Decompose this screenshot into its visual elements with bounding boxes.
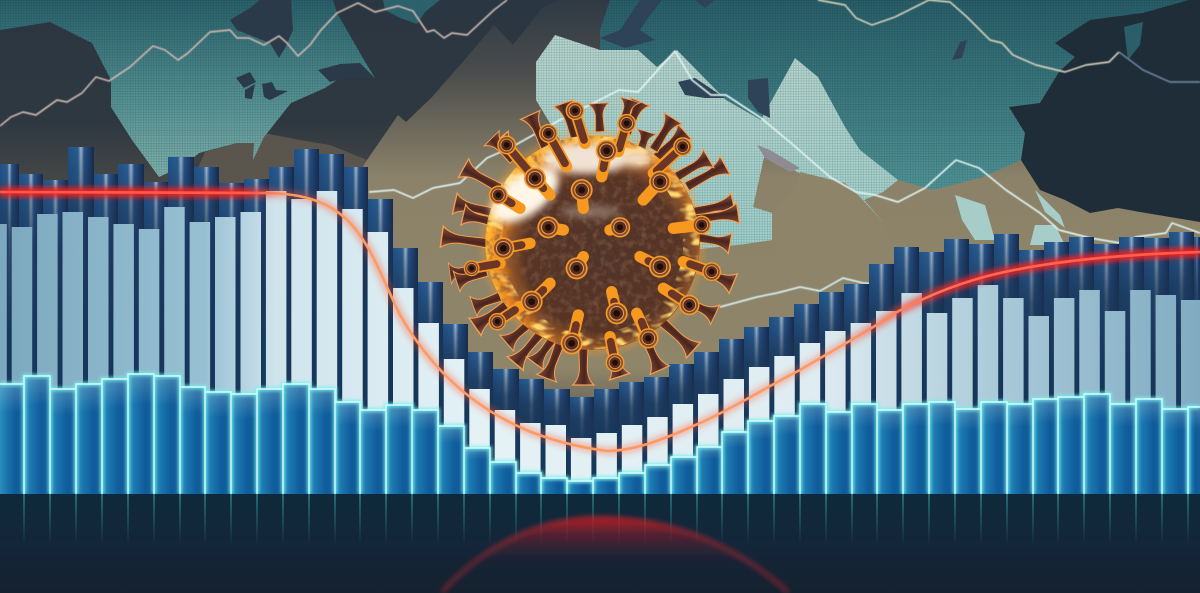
virus: spherical body (482, 135, 700, 350)
dark western region (0, 0, 560, 220)
chart: neon cyan bar outlines (0, 374, 1200, 494)
map: pale Africa and Middle East (536, 35, 898, 250)
line: lower trend (720, 278, 890, 307)
chart: glowing red trend curve (0, 192, 1200, 451)
reflected bar lines (24, 494, 1188, 545)
coronavirus illustration (440, 97, 740, 385)
line: central trend (369, 51, 1200, 243)
red curve reflection (440, 517, 790, 593)
virus: side spikes (440, 97, 740, 385)
map: eastern dark region (1009, 0, 1200, 222)
map: southeast Asia islands (955, 190, 1065, 245)
map: Eurasia (600, 0, 1189, 190)
chart: pale middle bars (0, 191, 1200, 494)
chart: dark back bars (0, 147, 1200, 494)
grey coastal shelf (195, 133, 367, 195)
line: far right trend (1119, 52, 1200, 82)
map: pixel grid overlay (0, 0, 1200, 260)
floor with reflections (0, 494, 1200, 593)
line: western trend (0, 0, 507, 126)
virus: flame-like rim (494, 144, 691, 341)
virus: bright highlights (482, 143, 652, 233)
line: upper right trend (818, 0, 1119, 72)
map: northern islands (383, 0, 440, 24)
map: tan Arabia and India (772, 172, 895, 262)
virus: outer glow (485, 135, 700, 350)
map: North America (0, 0, 375, 177)
map: dark European patches (600, 0, 967, 118)
line graphs on the map (0, 0, 1200, 307)
map: narrow sea inlet (1124, 22, 1143, 60)
chart: blue front bars (0, 374, 1200, 494)
virus: stalks of front-facing spikes (472, 111, 712, 363)
map: Hudson Bay and lakes (230, 0, 375, 100)
virus: front-facing spike cups (464, 101, 721, 372)
background: world map (0, 0, 1200, 397)
map: grey-violet strip (757, 145, 800, 172)
